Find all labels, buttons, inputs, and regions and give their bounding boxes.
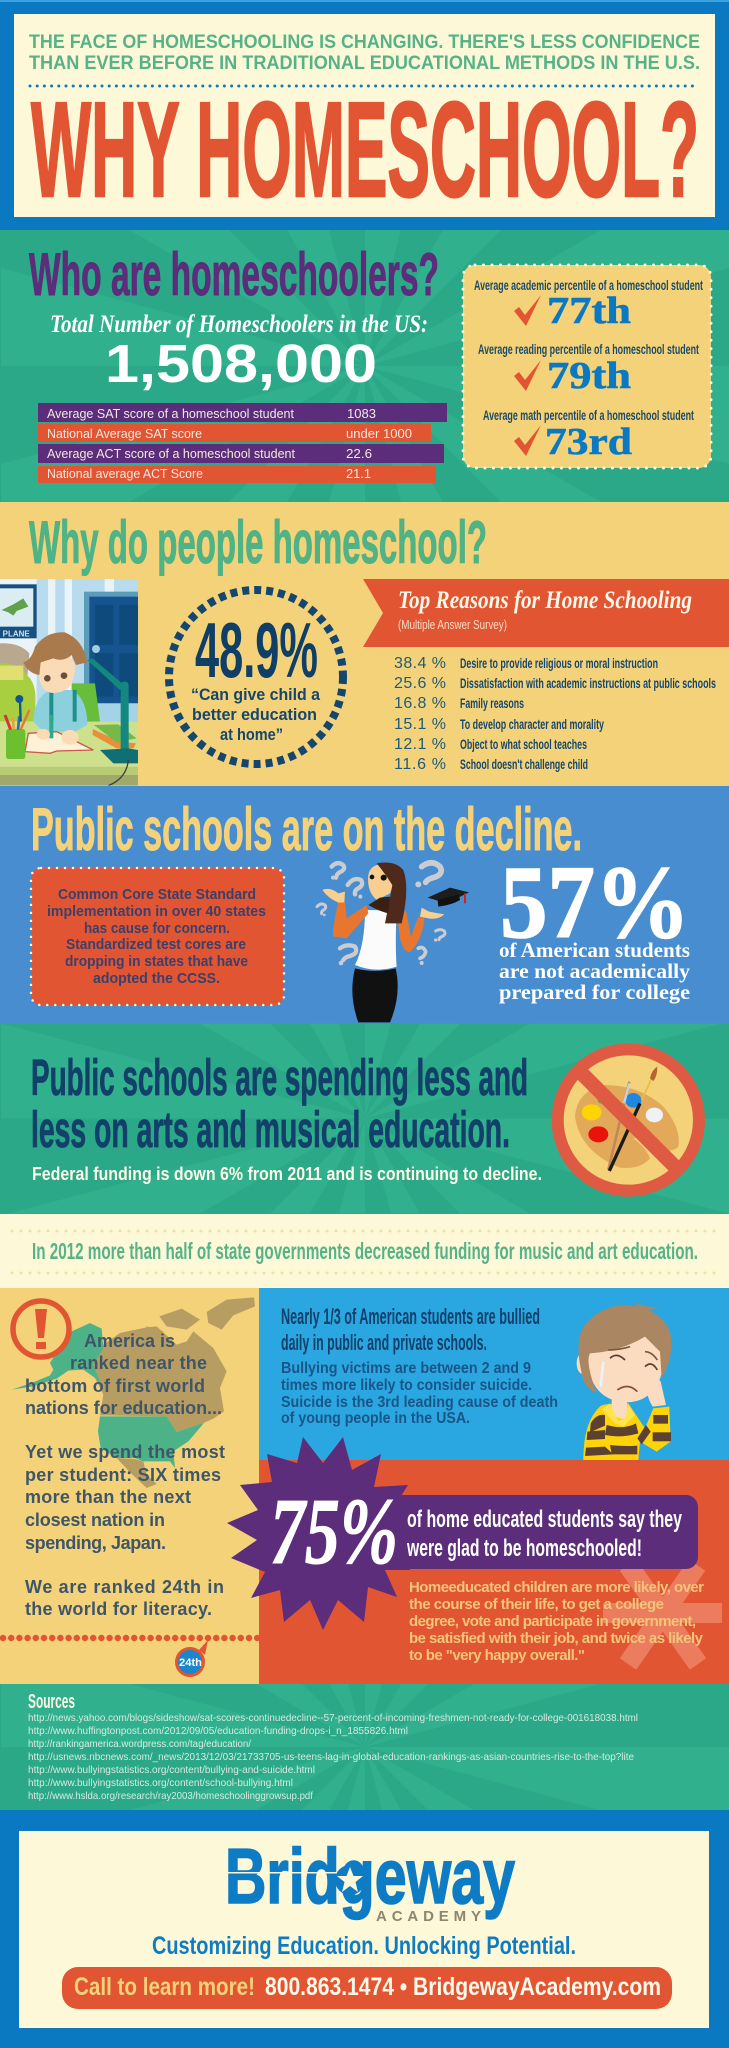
icon: exclamation: [13, 1301, 69, 1357]
percentile card: 79th: [547, 355, 631, 397]
callout: common core: [31, 868, 284, 1005]
map of north america: [12, 1297, 255, 1488]
text: education ranking: spending, Japan.: [25, 1533, 166, 1553]
subheading: Federal funding is down 6% from 2011 and is continuing to decline.: [32, 1164, 542, 1184]
illustration: confused woman: [317, 862, 469, 1022]
illustration: boy at desk: [0, 579, 138, 786]
text: education ranking: Yet we spend the most: [25, 1442, 225, 1462]
text: education ranking: bottom of first world: [25, 1376, 205, 1396]
bar: glad to be homeschooled: [380, 1495, 698, 1569]
panel: spending less on arts: [0, 1023, 729, 1214]
banner: top reasons: (Multiple Answer Survey): [398, 617, 507, 632]
stat: 75%: 75%: [270, 1480, 398, 1584]
panel: 75% glad: [227, 1437, 729, 1684]
text: education ranking: nations for education...: [25, 1398, 222, 1418]
text: bullying stats: [281, 1360, 558, 1427]
list: reasons: Object to what school teaches: [460, 736, 587, 752]
score bars: [38, 403, 447, 483]
intro text: [29, 32, 700, 74]
list: reasons: 11.6 %: [394, 756, 446, 773]
starburst: [227, 1437, 420, 1630]
panel: header: [0, 0, 729, 230]
panel: public schools decline: [0, 786, 729, 1023]
illustration: crying boy: [577, 1302, 671, 1460]
list: reasons: School doesn't challenge child: [460, 756, 588, 772]
text: bullying stats: Bullying victims are between 2 and 9: [281, 1360, 531, 1377]
score bars: under 1000: [346, 426, 412, 441]
heading: daily in public and private schools.: [281, 1330, 487, 1355]
banner: top reasons: [363, 579, 729, 647]
list: reasons: Family reasons: [460, 695, 524, 711]
illustration: boy at desk: PLANE: [3, 629, 30, 638]
score bars: Average ACT score of a homeschool student: [47, 446, 295, 461]
panel: bullying: [259, 1288, 729, 1460]
callout: 48.9% ring: better education: [192, 705, 317, 724]
text: outcomes: Homeeducated children are more likely, over: [409, 1579, 704, 1596]
score bars: 1083: [347, 406, 376, 421]
marker: 24th: [176, 1640, 208, 1676]
marker: 24th: 24th: [179, 1657, 202, 1669]
list: reasons: 38.4 %: [394, 655, 446, 672]
heading: Nearly 1/3 of American students are bullied: [281, 1304, 540, 1329]
stat: 57%: are not academically: [499, 959, 691, 983]
heading: [281, 1304, 540, 1355]
text: education ranking: ranked near the: [70, 1353, 207, 1373]
source list: [28, 1712, 638, 1802]
heading: [31, 1049, 528, 1158]
text: education ranking: the world for literacy.: [25, 1599, 212, 1619]
callout: 48.9% ring: “Can give child a: [191, 685, 320, 704]
text: outcomes: degree, vote and participate in government,: [409, 1613, 696, 1630]
panel: sources: [0, 1684, 729, 1810]
tagline: Customizing Education. Unlocking Potential.: [152, 1932, 576, 1960]
source list: http://www.bullyingstatistics.org/content/bullying-and-suicide.html: [28, 1764, 315, 1776]
call to action: [62, 1967, 672, 2009]
intro text: THAN EVER BEFORE IN TRADITIONAL EDUCATIONAL METHODS IN THE U.S.: [29, 53, 700, 74]
text: outcomes: the course of their life, to get a college: [409, 1596, 664, 1613]
source list: http://www.bullyingstatistics.org/content/school-bullying.html: [28, 1777, 293, 1789]
callout: 48.9% ring: at home”: [220, 725, 283, 744]
list: reasons: 16.8 %: [394, 695, 446, 712]
source list: http://usnews.nbcnews.com/_news/2013/12/03/21733705-us-teens-lag-in-global-education-rankings-as-asian-countries-rise-to-the-top?lite: [28, 1751, 634, 1763]
list: reasons: 25.6 %: [394, 675, 446, 692]
score bars: 21.1: [346, 466, 371, 481]
source list: http://www.huffingtonpost.com/2012/09/05/education-funding-drops-i_n_1855826.html: [28, 1725, 408, 1737]
score bars: National average ACT Score: [47, 466, 203, 481]
callout: 48.9% ring: [169, 590, 343, 764]
text: education ranking: America is: [84, 1331, 175, 1351]
callout: common core: Standardized test cores are: [66, 936, 246, 953]
panel: america ranked: [0, 1288, 259, 1684]
stat: 57%: of American students: [499, 938, 690, 962]
callout: common core: adopted the CCSS.: [93, 970, 220, 987]
panel: footer: [0, 1810, 729, 2048]
icon: no art palette: [558, 1049, 699, 1191]
percentile card: 73rd: [545, 421, 632, 463]
list: reasons: To develop character and morality: [460, 716, 604, 732]
text: outcomes: [409, 1579, 704, 1664]
text: education ranking: closest nation in: [25, 1510, 165, 1530]
text: bullying stats: Suicide is the 3rd leading cause of death: [281, 1394, 558, 1411]
callout: common core: Common Core State Standard: [58, 886, 256, 903]
panel: who are homeschoolers: [0, 230, 729, 502]
text: glad statement: [406, 1506, 682, 1562]
panel: why do people homeschool: [0, 502, 729, 786]
list: reasons: 15.1 %: [394, 716, 446, 733]
text: outcomes: be satisfied with their job, and twice as likely: [409, 1630, 704, 1647]
source list: http://news.yahoo.com/blogs/sideshow/sat-scores-continuedecline--57-percent-of-incoming-freshmen-not-ready-for-college-001618038.html: [28, 1712, 638, 1724]
callout: common core: has cause for concern.: [84, 920, 230, 937]
text: education ranking: more than the next: [25, 1487, 191, 1507]
text: bullying stats: of young people in the USA.: [281, 1410, 470, 1427]
callout: common core: dropping in states that have: [65, 953, 248, 970]
decorative asterisk: [603, 1565, 722, 1664]
source list: http://www.hslda.org/research/ray2003/homeschoolinggrowsup.pdf: [28, 1790, 313, 1802]
percentile card: [463, 265, 711, 468]
score bars: Average SAT score of a homeschool student: [47, 406, 294, 421]
text: outcomes: to be "very happy overall.": [409, 1647, 585, 1664]
list: reasons: 12.1 %: [394, 736, 446, 753]
percentile card: 77th: [547, 290, 631, 332]
score bars: National Average SAT score: [47, 426, 202, 441]
list: reasons: [394, 655, 716, 773]
text: education ranking: We are ranked 24th in: [25, 1577, 224, 1597]
score bars: 22.6: [346, 446, 372, 461]
callout: common core: implementation in over 40 states: [47, 903, 266, 920]
total label: Total Number of Homeschoolers in the US:: [50, 311, 428, 338]
text: bullying stats: times more likely to consider suicide.: [281, 1377, 532, 1394]
stat: 57%: 57%: [500, 845, 690, 960]
text: education ranking: per student: SIX times: [25, 1465, 221, 1485]
logo: Bridgeway Academy: Bridgeway: [225, 1832, 515, 1920]
call to action: Call to learn more!: [74, 1973, 255, 2001]
intro text: THE FACE OF HOMESCHOOLING IS CHANGING. THERE'S LESS CONFIDENCE: [29, 32, 700, 53]
text: education ranking: [25, 1331, 225, 1619]
source list: http://rankingamerica.wordpress.com/tag/education/: [28, 1738, 251, 1750]
stat: 57%: [499, 845, 691, 1004]
panel: state funding band: [0, 1214, 729, 1288]
callout: 48.9% ring: 48.9%: [195, 606, 318, 694]
heading: Sources: [28, 1691, 75, 1713]
total number: 1,508,000: [105, 334, 377, 394]
call to action: 800.863.1474 • BridgewayAcademy.com: [265, 1973, 661, 2001]
logo: Bridgeway Academy: ACADEMY: [376, 1908, 481, 1925]
stat: 57%: prepared for college: [499, 980, 690, 1004]
